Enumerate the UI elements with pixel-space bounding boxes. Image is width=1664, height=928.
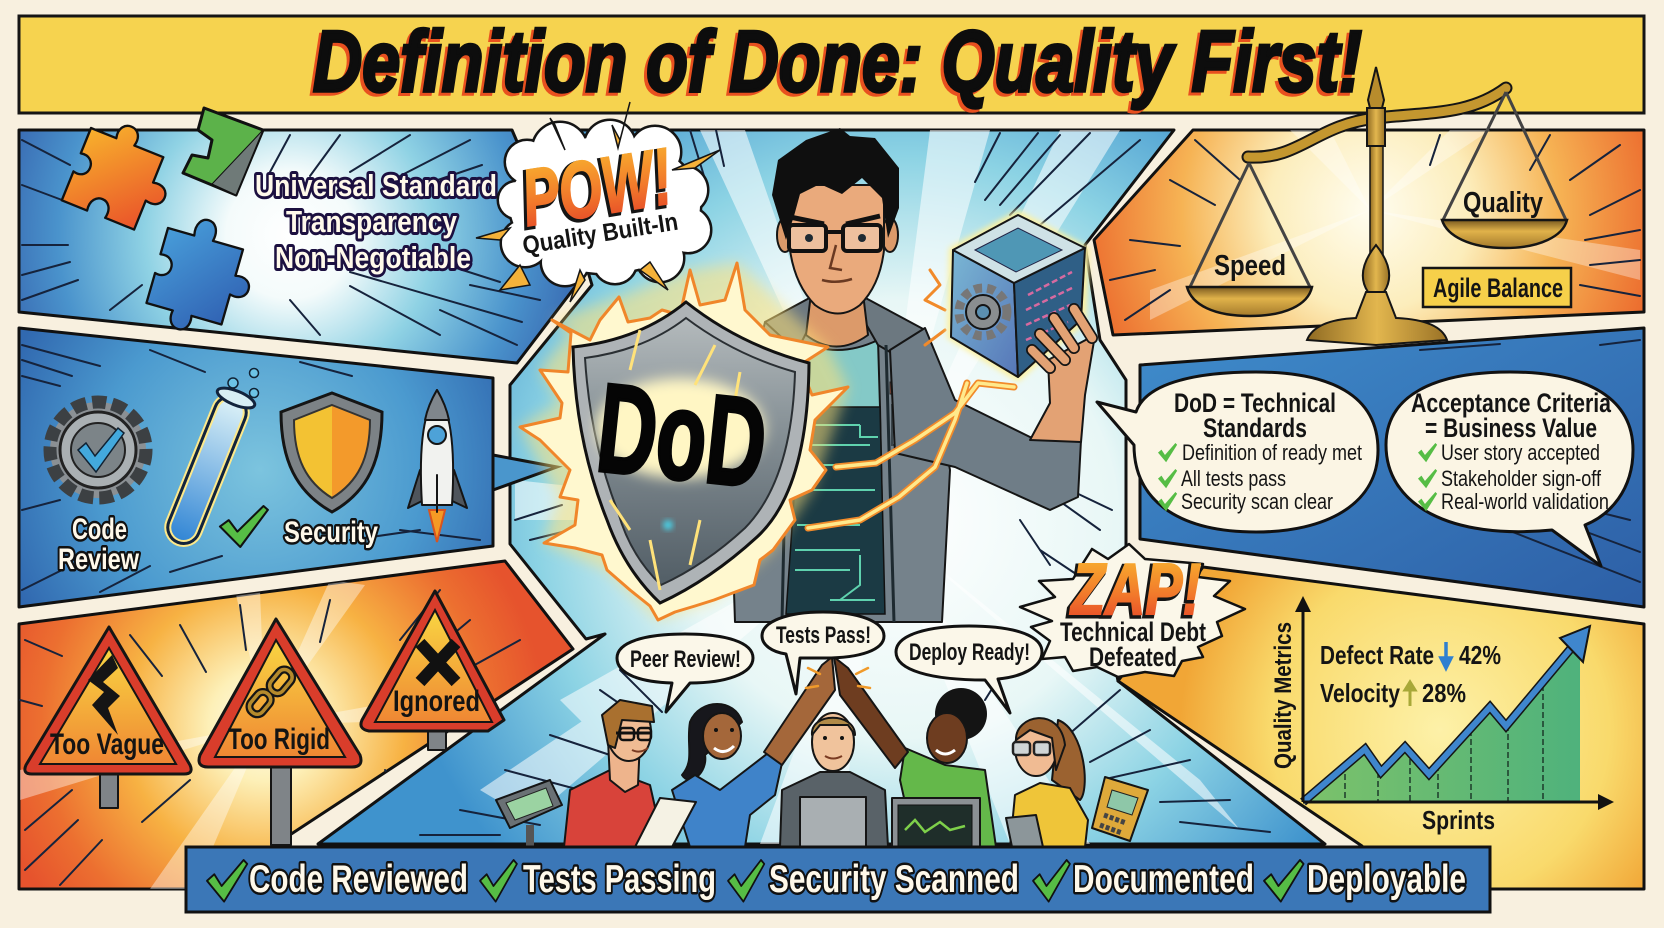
item: code reviewed: Code Reviewed [249, 858, 468, 901]
person: grey shirt [780, 713, 888, 847]
icon: review badge [50, 402, 146, 498]
shield metal [573, 302, 809, 603]
neck [806, 285, 868, 346]
callout: acceptance criteria business value: Stakeholder sign-off [1441, 466, 1602, 491]
icon: orange puzzle piece [62, 113, 185, 236]
person: yellow shirt [1006, 718, 1088, 847]
item: tests passing [480, 858, 716, 902]
glasses [789, 225, 881, 251]
callout: dod technical standards: DoD = Technical [1174, 388, 1336, 418]
label: agile balance: Agile Balance [1433, 273, 1563, 303]
title: Definition of Done: Quality First! [310, 17, 1359, 113]
callout: dod technical standards [1097, 372, 1378, 532]
label: code review [58, 513, 140, 576]
label: code review: Review [58, 543, 140, 576]
ears [777, 218, 793, 252]
person: red shirt [564, 700, 664, 847]
person: blue shirt [672, 657, 835, 847]
callout: acceptance criteria business value: = Business Value [1425, 413, 1597, 443]
callout: dod technical standards: Standards [1203, 413, 1307, 443]
illustration: lightning to code cube [808, 270, 1014, 528]
item: tests passing: Tests Passing [523, 858, 716, 901]
callout: acceptance criteria business value: User story accepted [1441, 440, 1600, 465]
illustration: team high-five [496, 657, 1148, 847]
speech bubble: deploy ready [896, 626, 1042, 713]
title banner [19, 14, 1644, 113]
callout: acceptance criteria business value: Acceptance Criteria [1411, 388, 1612, 418]
callout: zap [1020, 544, 1245, 677]
speech bubble: deploy ready: Deploy Ready! [909, 639, 1030, 666]
item: deployable [1264, 858, 1466, 902]
label: pow: POW! [516, 131, 678, 243]
label: technical debt defeated: Technical Debt [1060, 617, 1206, 647]
sign: too vague [25, 627, 191, 808]
speech bubble: peer review [617, 634, 753, 712]
panel: quality metrics background [1118, 567, 1644, 889]
icon: rocket [408, 390, 467, 542]
label: ignored: Ignored [393, 685, 480, 718]
collars [765, 295, 925, 352]
callout: acceptance criteria business value: Real-world validation [1441, 489, 1609, 514]
axis label: quality metrics: Quality Metrics [1270, 622, 1297, 769]
icon: test tube [163, 368, 258, 548]
panel: dod vs acceptance criteria background [1140, 328, 1644, 607]
label: quality: Quality [1463, 187, 1543, 219]
text block: universal standard: Universal Standard [255, 168, 497, 203]
title: Definition of Done: Quality First! [313, 14, 1362, 110]
label: pow: POW! [514, 133, 676, 245]
notepad [635, 798, 696, 847]
checklist banner [186, 847, 1490, 912]
person: green shirt [834, 657, 996, 847]
icon: green check [220, 506, 268, 547]
label: technical debt defeated [1060, 617, 1206, 672]
illustration: dod shield with energy [520, 263, 848, 620]
item: deployable: Deployable [1307, 858, 1466, 901]
label: technical debt defeated: Defeated [1089, 642, 1177, 672]
label: speed: Speed [1214, 250, 1286, 282]
callout: acceptance criteria business value [1386, 372, 1633, 566]
hair [772, 128, 899, 240]
item: documented: Documented [1073, 858, 1254, 901]
text block: universal standard [255, 168, 497, 275]
label: quality built-in: Quality Built-In [521, 208, 680, 260]
arrow: technical panel pointer [493, 455, 557, 490]
icon: code cube [947, 210, 1090, 382]
item: code reviewed [207, 858, 468, 902]
callout: dod technical standards: Definition of ready met [1182, 440, 1362, 465]
label: too vague: Too Vague [50, 728, 164, 761]
icon: blue puzzle piece [142, 210, 264, 345]
icon: security shield [281, 393, 382, 512]
panel: technical checks [19, 328, 493, 607]
panel: center hero background [318, 130, 1325, 844]
text block: universal standard: Transparency [286, 204, 458, 239]
stat: velocity: Velocity [1320, 678, 1400, 708]
stat: defect rate: Defect Rate [1320, 640, 1434, 670]
stat: velocity: 28% [1422, 678, 1466, 708]
face [790, 185, 884, 314]
text block: universal standard: Non-Negotiable [275, 240, 471, 275]
label: too rigid: Too Rigid [228, 723, 330, 756]
callout: dod technical standards: Security scan clear [1181, 489, 1333, 514]
speech bubble: tests pass [762, 612, 884, 694]
icon: balance scale [1187, 67, 1567, 345]
jacket body [730, 300, 950, 622]
label: zap: ZAP! [1067, 552, 1199, 632]
hand fingers over cube [1032, 309, 1092, 368]
raised arm sleeve [890, 328, 1081, 510]
t-shirt [790, 340, 884, 612]
label: agile balance [1423, 268, 1571, 307]
label: security: Security [284, 516, 378, 549]
stat: defect rate: 42% [1459, 640, 1501, 670]
device: scanner [496, 780, 562, 847]
axis label: sprints: Sprints [1422, 805, 1495, 835]
label: pow [514, 131, 678, 245]
item: security scanned [728, 858, 1019, 902]
panel: agile balance background [1094, 130, 1644, 335]
calculator [1092, 777, 1148, 841]
callout: pow [476, 102, 720, 302]
icon: green puzzle piece [183, 108, 263, 195]
panel: universal standard [19, 130, 578, 363]
high-five sparks [806, 668, 870, 688]
forearm and palm [1030, 335, 1095, 442]
speech bubble: tests pass: Tests Pass! [776, 622, 871, 649]
sign: too rigid [199, 619, 361, 845]
stat: velocity [1320, 678, 1466, 708]
speech bubble: peer review: Peer Review! [630, 646, 741, 673]
label: code review: Code [72, 513, 127, 546]
panel: warnings [19, 561, 573, 889]
item: security scanned: Security Scanned [769, 858, 1019, 901]
sign: ignored [361, 591, 504, 750]
label: dod: DoD [591, 357, 773, 514]
chart: quality metrics line [1270, 596, 1614, 835]
illustration: hero developer [730, 128, 1095, 622]
item: documented [1033, 858, 1254, 902]
label: zap: ZAP! [1069, 550, 1201, 630]
callout: dod technical standards: All tests pass [1181, 466, 1286, 491]
